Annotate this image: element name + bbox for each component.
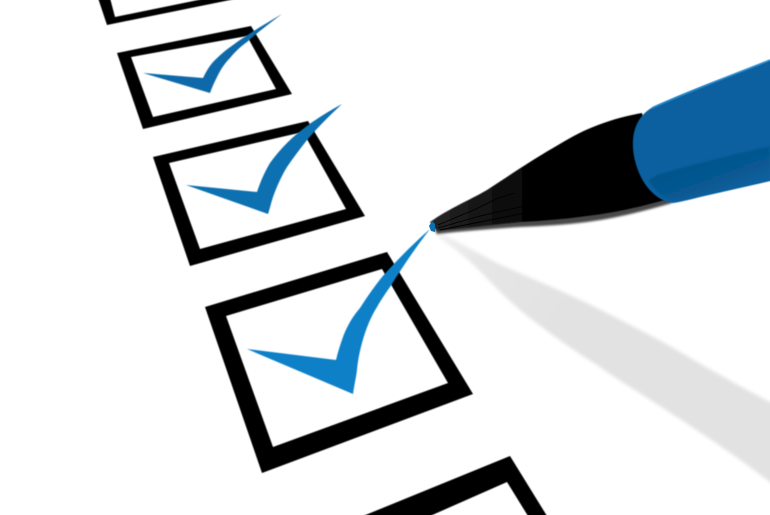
pen shadow xyxy=(436,230,770,486)
check mark 3 xyxy=(186,104,342,214)
pen tip xyxy=(429,113,672,234)
pen body xyxy=(633,58,770,203)
lower darker band xyxy=(649,146,770,200)
engraved lines on nib xyxy=(438,193,560,230)
checkbox 2 xyxy=(117,26,292,129)
blue ink point xyxy=(429,221,435,232)
black barrel xyxy=(430,113,668,231)
checkbox 5 (cropped bottom) xyxy=(363,456,547,515)
soft grey underside of the barrel xyxy=(433,150,672,234)
check mark 2 xyxy=(143,14,282,93)
checkbox 4 xyxy=(205,252,473,473)
checkbox 1 (cropped top) xyxy=(98,0,240,25)
top highlight xyxy=(652,60,770,108)
check mark 4 xyxy=(247,229,430,394)
checkbox 3 xyxy=(153,121,365,266)
